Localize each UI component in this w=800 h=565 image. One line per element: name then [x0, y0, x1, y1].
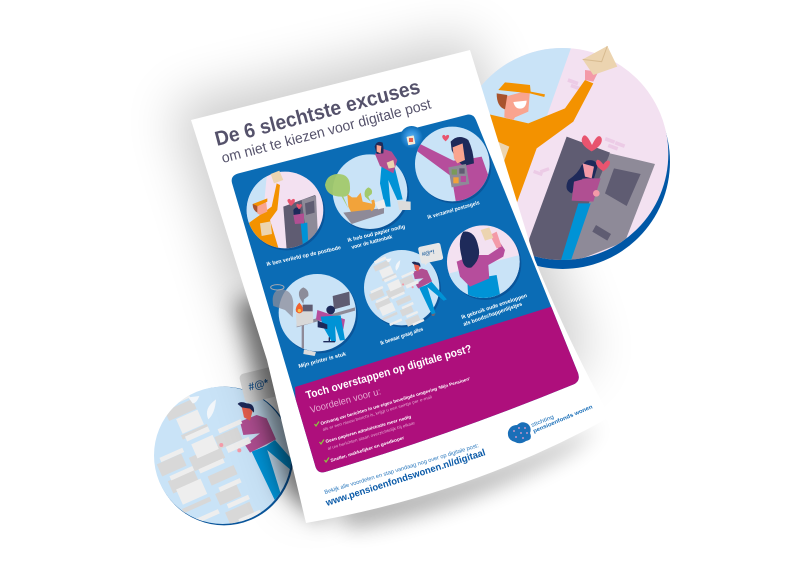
- benefit 2: al uw berichten staan overzichtelijk bij elkaar: [327, 420, 416, 451]
- label: excuse 1: Ik ben verliefd op de postbode: [266, 245, 342, 268]
- label: excuse 6: Ik gebruik oude enveloppen: [461, 293, 528, 321]
- benefits subheading: Voordelen voor u:: [309, 386, 382, 416]
- label: excuse 4: Mijn printer is stuk: [298, 351, 347, 370]
- icon: fund logo: [508, 422, 531, 443]
- subtitle: om niet te kiezen voor digitale post: [220, 97, 433, 167]
- label: excuse 3: Ik verzamel postzegels: [427, 200, 480, 221]
- panel: blue excuses panel: [232, 115, 579, 472]
- excuse 5: keeps everything: [364, 242, 447, 327]
- logo wordmark: pensioenfonds wonen: [532, 404, 594, 435]
- panel: magenta call to action: [295, 306, 579, 472]
- label: excuse 6: als boodschappenlijstjes: [463, 302, 523, 328]
- benefit 1: Ontvang uw berichten in uw eigen beveiligde omgeving 'Mijn Pensioen': [320, 376, 471, 426]
- footer prompt: Bekijk alle voordelen en stap vandaag nog over op digitale post:: [324, 443, 480, 496]
- excuse 4: broken printer: [271, 274, 358, 356]
- poster shadow: [172, 35, 600, 528]
- excuse 2: old paper for the litter box: [325, 142, 411, 231]
- small circle illustration: man with stacks of paper: #@*: [247, 377, 271, 394]
- poster sheet: [191, 50, 610, 523]
- small circle illustration: man with stacks of paper: [154, 365, 304, 525]
- large circle illustration: postman and woman at door: [481, 46, 670, 269]
- footer url: www.pensioenfondswonen.nl/digitaal: [324, 447, 487, 509]
- label: excuse 2: Ik heb oud papier nodig: [347, 224, 406, 244]
- excuse 5: keeps everything: #@*!: [421, 249, 435, 258]
- call to action heading: Toch overstappen op digitale post?: [305, 343, 473, 402]
- excuse 6: old envelopes as shopping lists: [443, 225, 523, 303]
- label: excuse 5: Ik bewaar graag alles: [380, 327, 424, 347]
- icon: check: [314, 422, 319, 426]
- icon: check: [320, 440, 324, 444]
- icon: check: [324, 458, 329, 462]
- title: De 6 slechtste excuses: [212, 75, 422, 151]
- excuse 1: in love with the postman: [243, 170, 325, 253]
- excuse 3: collects stamps: [400, 126, 491, 207]
- benefit 1: als er een nieuw bericht is, krijgt u een seintje per e-mail: [322, 394, 432, 432]
- logo wordmark: stichting: [531, 414, 555, 429]
- benefit 2: Geen papieren administratie meer nodig: [325, 414, 412, 444]
- label: excuse 2: voor de kattenbak: [351, 234, 393, 251]
- benefit 2: [320, 414, 416, 451]
- benefit 3: Sneller, makkelijker en goedkoper: [330, 435, 405, 463]
